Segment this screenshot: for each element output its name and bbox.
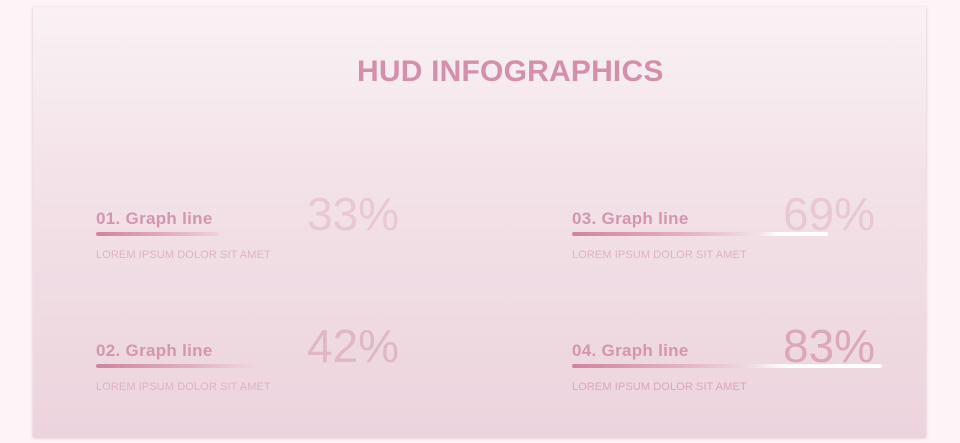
item 04 (572, 320, 882, 393)
item 01: 01. Graph line (96, 209, 213, 228)
item 02: LOREM IPSUM DOLOR SIT AMET (96, 381, 271, 393)
item 03: 03. Graph line (572, 209, 689, 228)
item 01: 33% (307, 188, 399, 240)
item 02: 42% (307, 320, 399, 372)
item 03 (572, 188, 875, 261)
item 04: 83% (783, 320, 875, 372)
item 02 (96, 320, 399, 393)
item 03: LOREM IPSUM DOLOR SIT AMET (572, 249, 747, 261)
item 01: LOREM IPSUM DOLOR SIT AMET (96, 249, 271, 261)
item 02: 02. Graph line (96, 341, 213, 360)
item 01 (96, 188, 399, 261)
item 04: LOREM IPSUM DOLOR SIT AMET (572, 381, 747, 393)
title: HUD INFOGRAPHICS (357, 55, 664, 88)
item 03: 69% (783, 188, 875, 240)
item 04: 04. Graph line (572, 341, 689, 360)
